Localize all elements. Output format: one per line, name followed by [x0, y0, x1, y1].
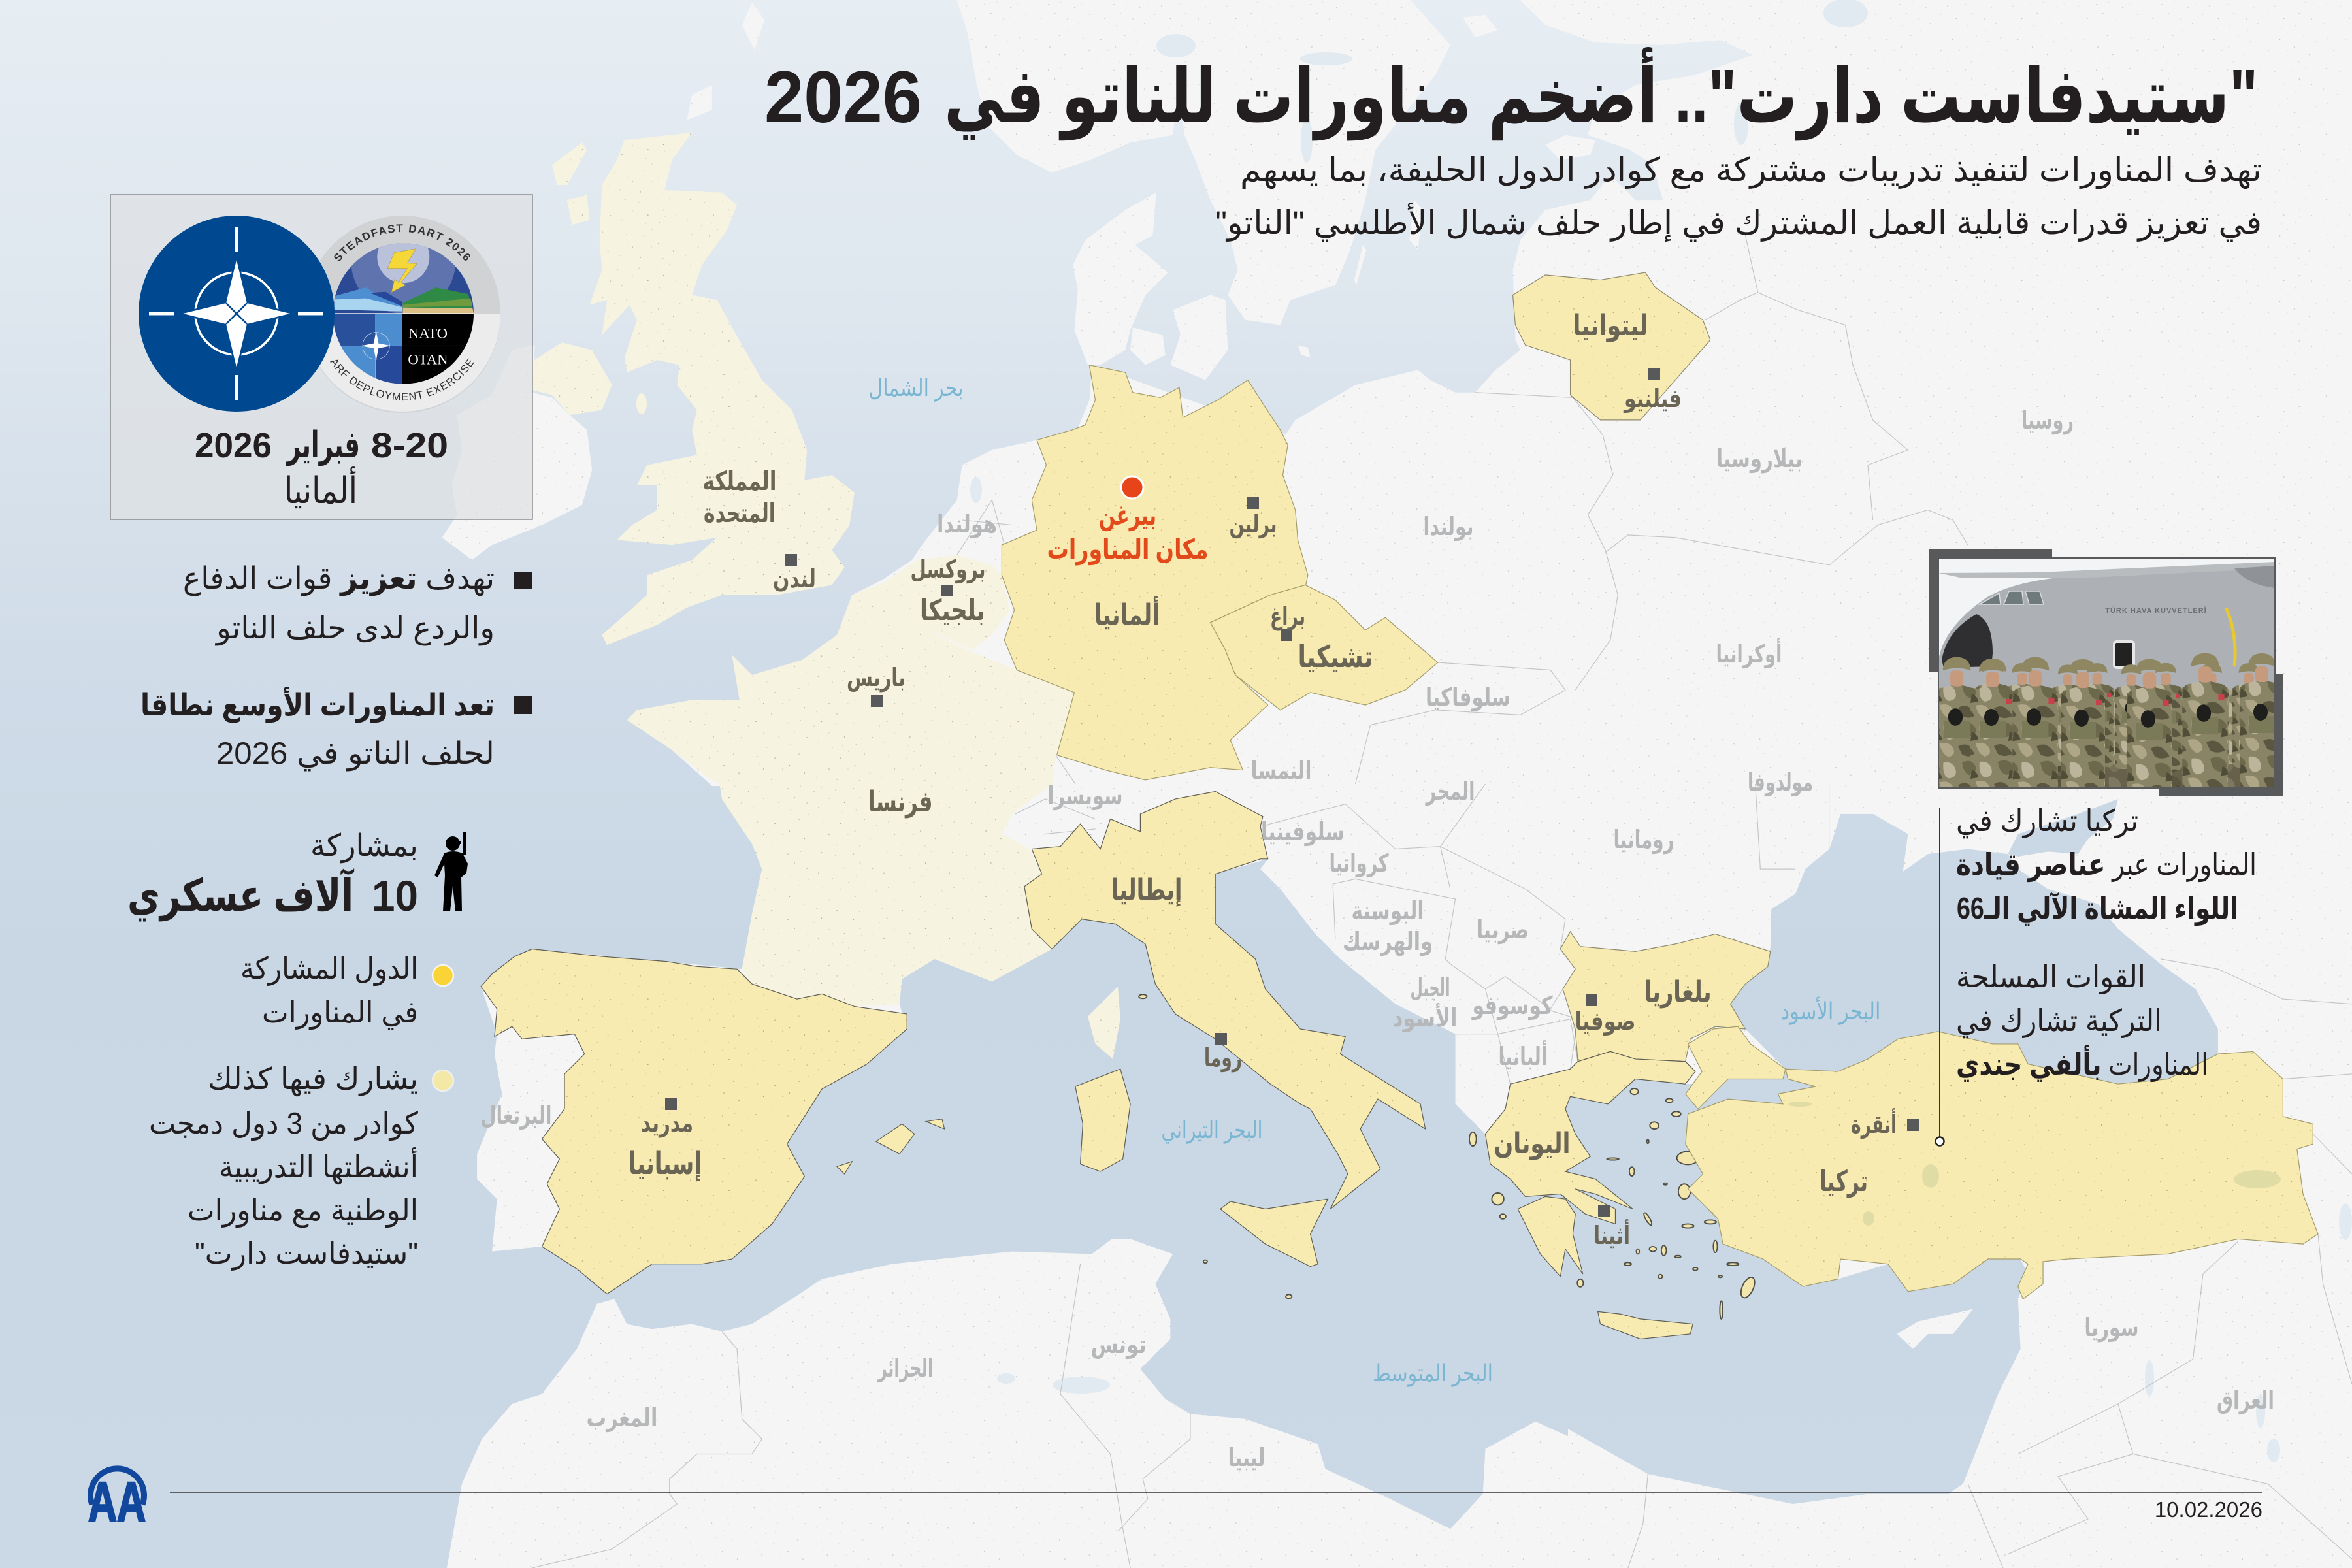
map labels: other countries: النمسا: [1250, 757, 1312, 785]
date: فبراير: [286, 424, 360, 466]
map labels: other countries: البرتغال: [481, 1102, 551, 1130]
bullets: exercise aims: لحلف الناتو في 2026: [216, 736, 495, 772]
map labels: other countries: كرواتيا: [1329, 850, 1389, 878]
location: germany: ألمانيا: [284, 466, 357, 511]
map labels: other countries: تونس: [1091, 1331, 1146, 1359]
map labels: participating countries and cities: فيلنيو: [1623, 385, 1682, 413]
map labels: participating countries and cities: فرنسا: [868, 786, 933, 819]
bullets: exercise aims: تهدف تعزيز قوات الدفاع: [183, 561, 495, 596]
map labels: participating countries and cities: إيطاليا: [1111, 874, 1183, 907]
marker: bergen exercise location: [1047, 476, 1209, 566]
map labels: participating countries and cities: المملكة: [703, 467, 776, 496]
map labels: participating countries and cities: المتحدة: [704, 499, 776, 528]
map labels: other countries: مولدوفا: [1748, 769, 1813, 797]
bullets: exercise aims: [140, 561, 532, 772]
country: italy: [1024, 791, 1426, 1267]
map labels: other countries: المغرب: [587, 1405, 657, 1432]
country: germany: [1002, 365, 1308, 780]
logo: steadfast dart badge: NATO: [408, 325, 448, 341]
subtitle: في تعزيز قدرات قابلية العمل المشترك في إطار حلف شمال الأطلسي "الناتو": [1215, 203, 2262, 242]
map labels: other countries: بولندا: [1423, 514, 1474, 541]
text block: turkish armed forces: المناورات بألفي جندي: [1956, 1045, 2208, 1083]
map labels: seas: البحر المتوسط: [1373, 1360, 1493, 1387]
photo: turkish soldiers in front of a plane: TÜRK HAVA KUVVETLERİ: [2105, 606, 2207, 615]
footer rule: [170, 1492, 2262, 1493]
icon: soldier: [434, 832, 468, 911]
map labels: participating countries and cities: تركيا: [1820, 1166, 1868, 1198]
map labels: other countries: الجبل: [1410, 975, 1450, 1002]
logo: steadfast dart badge: ARF DEPLOYMENT EXERCISE: [330, 358, 474, 401]
logo: steadfast dart badge: STEADFAST DART 2026: [334, 224, 470, 261]
text block: turkey participation: اللواء المشاة الآلي الـ66: [1957, 891, 2238, 926]
subtitle: تهدف المناورات لتنفيذ تدريبات مشتركة مع كوادر الدول الحليفة، بما يسهم: [1240, 152, 2262, 189]
text block: turkey participation: تركيا تشارك في: [1956, 804, 2138, 839]
map labels: participating countries and cities: صوفيا: [1575, 1008, 1636, 1036]
map labels: other countries: سلوفاكيا: [1426, 684, 1511, 711]
legend: countries with integrated staff: أنشطتها التدريبية: [219, 1147, 418, 1184]
logo: anadolu agency: [88, 1469, 146, 1533]
country: spain: [481, 949, 945, 1294]
logo: anadolu agency: AA: [88, 1471, 146, 1533]
country: united kingdom: [532, 133, 855, 645]
date stamp: 10.02.2026: [2155, 1497, 2262, 1522]
map labels: participating countries and cities: [629, 310, 1897, 1250]
logo: steadfast dart badge: OTAN: [408, 351, 448, 367]
callout: 10 thousand soldiers: 10: [372, 872, 418, 920]
legend: participating countries: في المناورات: [262, 995, 418, 1030]
map labels: seas: البحر الأسود: [1781, 996, 1880, 1025]
legend: countries with integrated staff: [149, 1062, 453, 1271]
legend: participating countries: الدول المشاركة: [240, 951, 418, 987]
map labels: other countries: [481, 407, 2274, 1472]
map labels: other countries: روسيا: [2021, 407, 2074, 435]
map labels: participating countries and cities: أنقرة: [1851, 1108, 1897, 1139]
map labels: participating countries and cities: تشيكيا: [1298, 640, 1373, 674]
title: 2026: [764, 56, 922, 138]
bullets: exercise aims: والردع لدى حلف الناتو: [215, 610, 495, 646]
photo: turkish soldiers in front of a plane: [1929, 549, 2284, 803]
map labels: other countries: بيلاروسيا: [1716, 446, 1803, 474]
map labels: other countries: المجر: [1425, 778, 1475, 806]
map labels: other countries: صربيا: [1477, 917, 1529, 944]
map labels: other countries: الأسود: [1393, 1002, 1457, 1032]
map labels: other countries: ليبيا: [1228, 1445, 1265, 1472]
map labels: other countries: العراق: [2217, 1387, 2274, 1414]
map labels: other countries: والهرسك: [1343, 928, 1433, 956]
map labels: participating countries and cities: أثينا: [1593, 1219, 1630, 1250]
text block: turkey participation: المناورات عبر عناصر قيادة: [1956, 847, 2257, 883]
text block: turkish armed forces: [1956, 960, 2208, 1083]
marker: bergen exercise location: بيرغن: [1099, 500, 1156, 532]
map labels: participating countries and cities: ألمانيا: [1094, 596, 1160, 631]
map labels: participating countries and cities: باريس: [847, 664, 906, 692]
date: [195, 424, 448, 466]
map labels: participating countries and cities: بلجيكا: [920, 595, 985, 627]
logo: steadfast dart badge: [319, 216, 500, 413]
map labels: participating countries and cities: براغ: [1270, 603, 1305, 630]
country: turkey: [1686, 1026, 2318, 1299]
map labels: other countries: كوسوفو: [1471, 992, 1553, 1020]
map labels: participating countries and cities: بروكسل: [911, 556, 985, 584]
city markers: [665, 368, 1919, 1217]
logo: nato emblem: [139, 216, 335, 412]
map labels: participating countries and cities: إسبانيا: [629, 1147, 702, 1182]
map labels: participating countries and cities: برلين: [1230, 511, 1277, 538]
map labels: participating countries and cities: اليونان: [1494, 1128, 1571, 1160]
map labels: other countries: ألبانيا: [1499, 1040, 1547, 1071]
map labels: other countries: سلوفينيا: [1261, 819, 1345, 846]
map labels: other countries: الجزائر: [877, 1355, 933, 1382]
text block: turkish armed forces: التركية تشارك في: [1956, 1004, 2162, 1039]
panel: date and logos: [110, 194, 533, 520]
map labels: other countries: أوكرانيا: [1716, 638, 1782, 669]
callout: 10 thousand soldiers: آلاف عسكري: [127, 868, 354, 922]
map labels: other countries: البوسنة: [1351, 898, 1424, 925]
country: belgium: [885, 555, 1009, 650]
legend: countries with integrated staff: كوادر من 3 دول دمجت: [149, 1106, 418, 1141]
subtitle: [1215, 152, 2262, 242]
country: lithuania: [1513, 272, 1710, 420]
country: france: [627, 583, 1075, 1007]
country: czechia: [1211, 585, 1438, 710]
map labels: other countries: هولندا: [937, 511, 997, 538]
map labels: participating countries and cities: روما: [1204, 1045, 1242, 1073]
map labels: participating countries and cities: لندن: [773, 566, 816, 593]
map labels: seas: [869, 374, 1880, 1387]
map labels: seas: بحر الشمال: [869, 374, 963, 402]
map labels: seas: البحر التيراني: [1162, 1117, 1262, 1144]
bullets: exercise aims: تعد المناورات الأوسع نطاقا: [140, 686, 495, 723]
date: 8-20: [371, 426, 448, 465]
legend: countries with integrated staff: يشارك فيها كذلك: [208, 1062, 418, 1096]
legend: countries with integrated staff: الوطنية مع مناورات: [188, 1193, 418, 1228]
map: lakes: [970, 0, 2352, 1462]
callout: 10 thousand soldiers: بمشاركة: [310, 828, 418, 863]
map labels: participating countries and cities: بلغاريا: [1644, 976, 1712, 1009]
callout: 10 thousand soldiers: [127, 828, 418, 922]
text block: turkish armed forces: القوات المسلحة: [1956, 960, 2146, 995]
map labels: other countries: سويسرا: [1048, 783, 1122, 810]
map labels: other countries: سوريا: [2084, 1315, 2139, 1342]
leader line: turkey callout: [1935, 808, 1944, 1146]
marker: bergen exercise location: مكان المناورات: [1047, 534, 1209, 566]
map: country borders: [532, 235, 2352, 1568]
legend: participating countries: [240, 951, 453, 1030]
map labels: participating countries and cities: مدريد: [641, 1110, 693, 1137]
country: bulgaria: [1560, 932, 1771, 1062]
legend: countries with integrated staff: "ستيدفاست دارت": [195, 1236, 418, 1271]
text block: turkey participation: [1956, 804, 2257, 926]
map labels: other countries: رومانيا: [1614, 826, 1674, 855]
map labels: participating countries and cities: ليتوانيا: [1573, 310, 1648, 342]
date: 2026: [195, 426, 272, 465]
map: ireland: [442, 345, 592, 560]
island: corsica: [1088, 987, 1120, 1059]
country: greece: [1139, 994, 1757, 1339]
